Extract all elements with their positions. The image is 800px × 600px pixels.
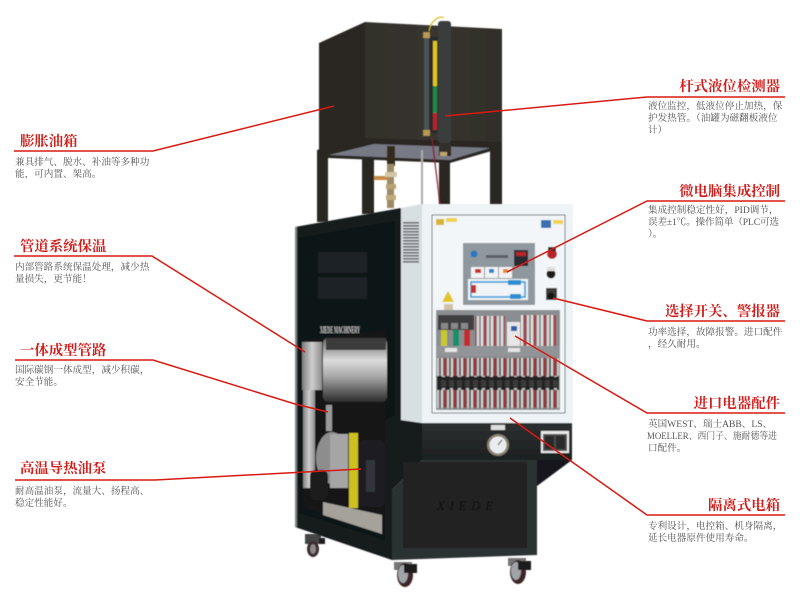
callout: 一体成型管路: 安全节能。: [15, 376, 63, 388]
breaker: [438, 315, 474, 330]
callout: 隔离式电箱: 专利设计，电控箱、机身隔离，: [648, 520, 782, 532]
leader: piping insulation: [14, 256, 305, 352]
callout: 隔离式电箱: 延长电器原件使用寿命。: [648, 532, 754, 544]
brass piping: [374, 146, 423, 208]
pressure gauge: [487, 425, 509, 456]
bottom dark control band: [422, 423, 572, 460]
pump body: [316, 432, 348, 484]
leader: microcomputer: [507, 201, 785, 272]
caster front right: [508, 558, 531, 584]
callout: 进口电器配件: [647, 394, 781, 454]
leader: switches: [553, 298, 785, 321]
grille: [403, 221, 419, 264]
yellow coupling guard: [349, 433, 358, 508]
callout: 进口电器配件: 进口电器配件: [694, 394, 781, 412]
callout: 杆式液位检测器: 计）: [648, 124, 667, 136]
leader: level detector: [445, 97, 785, 116]
callout: 一体成型管路: [15, 341, 149, 388]
casters: [305, 534, 531, 587]
callout: 杆式液位检测器: 杆式液位检测器: [679, 77, 781, 95]
leader: relays: [515, 336, 785, 413]
callout: 膨胀油箱: [15, 132, 150, 180]
tank front face: [365, 22, 502, 142]
front panel: [422, 204, 573, 423]
insulated pipe: [302, 342, 322, 390]
callout: 管道系统保温: [15, 237, 150, 285]
tank left face: [319, 22, 365, 153]
callout: 微电脑集成控制: 微电脑集成控制: [679, 182, 780, 200]
leader: expansion tank: [14, 106, 334, 151]
callout: 微电脑集成控制: [648, 182, 780, 240]
rod level detector: [423, 17, 451, 204]
black side panel: [295, 208, 422, 560]
internal window: [302, 330, 387, 535]
cabinet body: XIEDE MACHINERY: [320, 326, 360, 336]
inner door frame: [432, 215, 565, 413]
lower wiring: [437, 358, 559, 376]
callout: 管道系统保温: 内部管路系统保温处理，减少热: [15, 261, 150, 273]
callout: 进口电器配件: 英国WEST、瑞士ABB、LS、: [648, 418, 772, 430]
leader: electric box: [510, 418, 785, 515]
callout: 高温导热油泵: 稳定性能好。: [15, 497, 73, 509]
box brand: XIEDE: [436, 499, 493, 513]
callout: 高温导热油泵: [15, 459, 149, 509]
caster front centre: [394, 562, 417, 587]
frame legs: [317, 136, 502, 222]
callout: 杆式液位检测器: [648, 77, 783, 136]
switches and alarm: [546, 247, 557, 300]
callout: 隔离式电箱: [648, 496, 782, 544]
callout: 一体成型管路: 国际碳钢一体成型，减少积碳，: [15, 364, 149, 376]
callout: 膨胀油箱: 膨胀油箱: [20, 132, 78, 150]
callout: 选择开关、警报器: ，经久耐用。: [648, 338, 706, 350]
electrical compartment: [436, 310, 560, 410]
warning triangle and valve: [442, 291, 454, 311]
callout: 微电脑集成控制: 误差±1℃。操作简单（PLC可选: [648, 216, 779, 228]
callout: 管道系统保温: 量损失，更节能！: [15, 273, 92, 285]
callout: 杆式液位检测器: 护发热管。（油罐为磁翻板液位: [648, 112, 778, 124]
callout: 进口电器配件: 口配件。: [648, 442, 686, 454]
nameplate: [541, 431, 569, 453]
cabinet body: [295, 204, 573, 560]
leader: integral pipe: [15, 360, 328, 412]
upper wiring: [475, 316, 505, 346]
callout: 膨胀油箱: 兼具排气、脱水、补油等多种功: [15, 156, 150, 168]
callout: 微电脑集成控制: ）。: [648, 229, 662, 240]
callout: 一体成型管路: 一体成型管路: [20, 341, 107, 359]
side vents: [318, 252, 367, 299]
callout: 隔离式电箱: 隔离式电箱: [708, 496, 780, 514]
leader: oil pump: [15, 469, 361, 480]
caster left rear: [305, 534, 325, 557]
callout: 杆式液位检测器: 液位监控，低液位停止加热，保: [648, 100, 783, 112]
red leader lines: [14, 97, 785, 515]
callout: 高温导热油泵: 高温导热油泵: [20, 459, 106, 477]
right gusset: [536, 460, 572, 486]
white front side return: [401, 204, 422, 423]
callout: 选择开关、警报器: 选择开关、警报器: [665, 302, 781, 320]
tank underside: [329, 144, 490, 160]
lower box: [392, 460, 537, 560]
warning labels: [436, 218, 563, 228]
callout: 选择开关、警报器: 功率选择，故障报警。进口配件: [648, 326, 783, 338]
pipe elbow: [326, 405, 332, 431]
callout: 高温导热油泵: 耐高温油泵，流量大、扬程高、: [15, 485, 149, 497]
callout: 管道系统保温: 管道系统保温: [20, 237, 107, 255]
insulated tank: [323, 338, 387, 402]
expansion tank on frame: [317, 22, 502, 222]
callout: 选择开关、警报器: [648, 302, 783, 350]
motor: [358, 440, 385, 507]
HMI control panel: [463, 243, 535, 305]
base plate: [323, 502, 382, 534]
callout: 膨胀油箱: 能，可内置、架高。: [15, 168, 101, 180]
callout: 进口电器配件: MOELLER、西门子、施耐德等进: [647, 430, 777, 442]
callout: 微电脑集成控制: 集成控制稳定性好，PID调节，: [648, 204, 779, 216]
